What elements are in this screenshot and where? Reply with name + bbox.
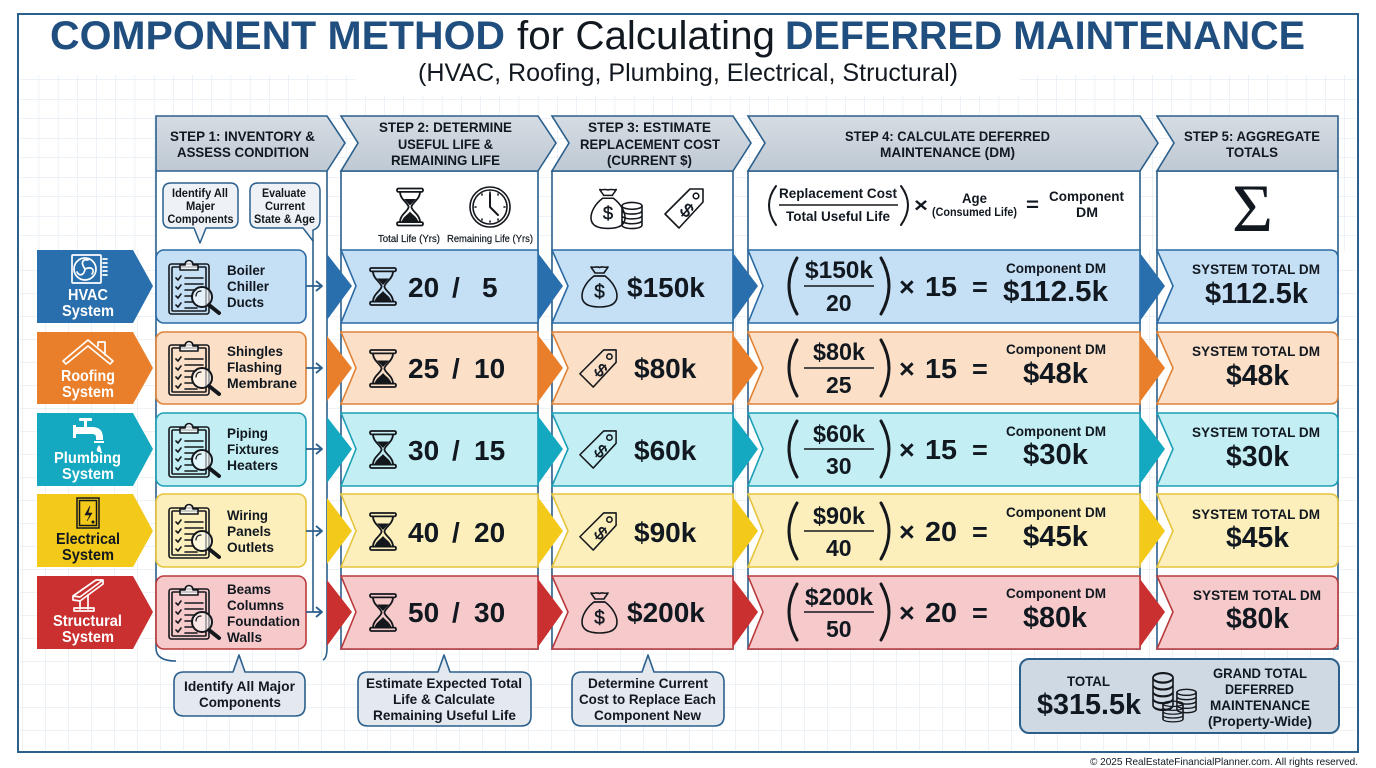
step 4 formula [769,185,1124,225]
system tab [37,250,153,323]
system tab [37,413,153,486]
calculation [733,576,1140,649]
components: Membrane [227,375,297,391]
calculation: 15 [925,271,957,302]
components: Walls [227,629,262,645]
system total: SYSTEM TOTAL DM [1192,261,1320,277]
callout: determine current cost [572,655,724,726]
system total [1140,332,1338,404]
step 2 icons [397,187,510,227]
calculation: = [972,435,988,465]
components [156,332,322,404]
row: Plumbing [37,413,1338,486]
system tab [37,576,153,649]
calculation: $45k [1023,521,1089,553]
life values: 50 [408,597,439,628]
components: Fixtures [227,441,279,457]
life values: 30 [408,435,439,466]
grand total panel: TOTAL [1067,673,1110,689]
calculation: × [899,435,915,465]
title: DEFERRED MAINTENANCE [785,14,1305,58]
components: Boiler [227,262,266,278]
system total [1140,576,1338,649]
calculation [733,413,1140,486]
callout: identify components: Components [168,214,234,226]
calculation: Component DM [1006,341,1106,357]
step 4 formula: Component [1049,188,1124,204]
calculation: 30 [826,453,852,479]
system total: $48k [1226,360,1290,392]
replacement cost [538,250,733,323]
calculation: $150k [805,257,874,284]
connector line [312,240,314,612]
system tab: System [62,547,114,564]
callout: evaluate state: Current [265,201,305,213]
title: COMPONENT METHOD [50,14,505,58]
step 2 icon labels [378,234,533,245]
step 2 header: STEP 2: DETERMINE [379,119,512,135]
icon: coin stacks [1153,673,1196,722]
callout: identify all major components [174,655,305,716]
step 2 icon labels: Remaining Life (Yrs) [447,234,533,245]
system total: $80k [1226,603,1290,635]
grand total panel: (Property-Wide) [1208,713,1312,729]
step 5 sigma: Σ [1232,170,1273,246]
row: Roofing [37,332,1338,404]
calculation: × [899,354,915,384]
components [156,250,322,323]
step 4 formula: DM [1076,204,1098,220]
system total [1140,494,1338,567]
components: Panels [227,523,271,539]
icon: money bag and coins [591,189,642,229]
callout: estimate expected life: Remaining Useful Life [373,707,516,723]
step 3 header: REPLACEMENT COST [580,136,720,152]
calculation: 40 [826,535,852,561]
grand total panel [1020,659,1339,733]
step 4 formula: Replacement Cost [779,185,897,201]
column bodies [156,171,1338,661]
calculation: × [899,598,915,628]
step 2 header: REMAINING LIFE [391,152,500,168]
life values: / [452,517,460,548]
calculation: × [899,272,915,302]
system tab: System [62,466,114,483]
step 4 formula: Age [962,190,987,206]
life values: 5 [482,272,498,303]
title: for Calculating [517,14,775,58]
calculation: $30k [1023,439,1089,471]
calculation: $48k [1023,358,1089,390]
step 4 formula: = [1026,195,1039,216]
life values [327,494,538,567]
calculation: $112.5k [1003,276,1109,308]
step 3 header: STEP 3: ESTIMATE [588,119,711,135]
system total: SYSTEM TOTAL DM [1192,506,1320,522]
replacement cost: $90k [634,517,697,548]
replacement cost [538,494,733,567]
life values: / [452,272,460,303]
step 4 formula: Total Useful Life [786,208,890,224]
icon: price tag [665,189,703,228]
calculation: $80k [1023,602,1088,634]
system total: $112.5k [1205,278,1309,310]
system tab: HVAC [68,287,108,304]
callout: determine current cost: Component New [594,707,701,723]
system tab: System [62,384,114,401]
components: Wiring [227,507,268,523]
callout: estimate expected life: Life & Calculate [393,691,495,707]
system tab [37,332,153,404]
replacement cost: $80k [634,353,697,384]
icon: roof [63,340,113,364]
life values [327,250,538,323]
life values: 25 [408,353,439,384]
grand total panel: MAINTENANCE [1210,697,1310,713]
system tab: Structural [53,613,122,630]
calculation: $60k [813,421,866,448]
life values [327,413,538,486]
components: Heaters [227,457,278,473]
icon: hourglass [397,188,423,226]
step 4 formula: (Consumed Life) [932,207,1017,219]
step 4 header: STEP 4: CALCULATE DEFERRED [845,128,1050,144]
step 2 header [341,116,556,171]
step 4 formula: × [914,195,928,217]
row: Electrical [37,494,1338,567]
calculation: Component DM [1006,260,1106,276]
icon: steel beam [73,580,103,611]
life values: 20 [408,272,439,303]
icon: electrical panel [77,498,99,528]
replacement cost: $200k [627,597,705,628]
components [156,494,322,567]
system tab: Roofing [61,368,115,385]
icon: clock [470,187,510,227]
callout: determine current cost: Cost to Replace Each [579,691,716,707]
step 3 header: (CURRENT $) [607,152,692,168]
system total: SYSTEM TOTAL DM [1192,343,1320,359]
components [156,576,322,649]
calculation: $80k [813,339,866,366]
replacement cost: $60k [634,435,697,466]
calculation: 15 [925,434,957,465]
calculation: Component DM [1006,423,1106,439]
callout: identify components: Identify All [172,188,228,200]
system total [1140,413,1338,486]
step 3 header [552,116,751,171]
life values: / [452,353,460,384]
components: Flashing [227,359,282,375]
system tab: Electrical [56,531,120,548]
calculation: = [972,598,988,628]
step 5 header: STEP 5: AGGREGATE [1184,128,1320,144]
calculation: 15 [925,353,957,384]
replacement cost [538,576,733,649]
system total: SYSTEM TOTAL DM [1192,424,1320,440]
calculation: $200k [805,584,874,611]
system tab: Plumbing [54,450,121,467]
step 1 header: STEP 1: INVENTORY & [170,128,315,144]
footer copyright: © 2025 RealEstateFinancialPlanner.com. All rights reserved. [1090,756,1358,768]
step 2 header: USEFUL LIFE & [398,136,493,152]
calculation: $90k [813,503,866,530]
calculation [733,494,1140,567]
step 4 header [748,116,1158,171]
calculation [733,250,1140,323]
callout: determine current cost: Determine Current [588,675,708,691]
calculation: 20 [925,597,957,628]
row: HVAC [37,250,1338,323]
icon: faucet [73,418,104,452]
calculation: = [972,354,988,384]
replacement cost [538,413,733,486]
step 4 header: MAINTENANCE (DM) [880,144,1015,160]
step 1 header: ASSESS CONDITION [177,144,309,160]
components: Foundation [227,613,300,629]
calculation: 20 [925,516,957,547]
system total: $30k [1226,441,1290,473]
system tab [37,494,153,567]
components: Beams [227,581,271,597]
life values [327,332,538,404]
components: Outlets [227,539,274,555]
life values: 10 [474,353,505,384]
callout: identify components [163,183,238,243]
calculation: × [899,517,915,547]
calculation: 20 [826,290,852,316]
life values: / [452,597,460,628]
grand total panel: $315.5k [1037,689,1142,721]
system total: SYSTEM TOTAL DM [1193,587,1321,603]
callout: evaluate state: Evaluate [262,188,306,200]
components: Ducts [227,294,264,310]
components: Shingles [227,343,283,359]
calculation: 50 [826,616,852,642]
step 5 header [1157,116,1338,171]
callout: evaluate state: State & Age [254,214,315,226]
grand total panel: GRAND TOTAL [1213,665,1307,681]
row: Structural [37,576,1338,649]
step 1 header [156,116,345,171]
life values: / [452,435,460,466]
calculation: = [972,272,988,302]
components: Piping [227,425,268,441]
life values: 30 [474,597,505,628]
calculation: Component DM [1006,585,1106,601]
system total [1140,250,1338,323]
system tab: System [62,629,114,646]
life values: 40 [408,517,439,548]
system tab: System [62,303,114,320]
calculation [733,332,1140,404]
components: Columns [227,597,284,613]
components [156,413,322,486]
life values [327,576,538,649]
grand total panel: DEFERRED [1225,681,1294,697]
callout: evaluate state [250,183,320,241]
life values: 20 [474,517,505,548]
step 3 icons [591,189,703,229]
components: Chiller [227,278,270,294]
callout: identify all major components: Identify All Major [184,678,296,694]
callout: estimate expected life [358,655,531,726]
replacement cost: $150k [627,272,705,303]
calculation: 25 [826,372,852,398]
step 2 icon labels: Total Life (Yrs) [378,234,440,245]
life values: 15 [474,435,505,466]
icon: hvac fan [72,255,107,283]
step 5 header: TOTALS [1226,144,1278,160]
system total: $45k [1226,522,1290,554]
callout: identify components: Majer [186,201,216,213]
callout: identify all major components: Components [199,694,281,710]
subtitle: (HVAC, Roofing, Plumbing, Electrical, Structural) [418,59,958,87]
replacement cost [538,332,733,404]
callout: estimate expected life: Estimate Expected Total [366,675,522,691]
calculation: Component DM [1006,504,1106,520]
calculation: = [972,517,988,547]
